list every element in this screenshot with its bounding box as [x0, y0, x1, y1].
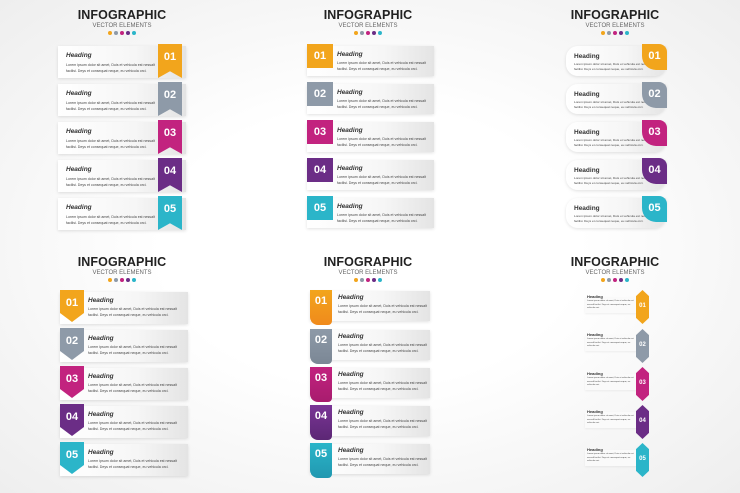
panel 1: ribbon bookmarks: 02 [164, 89, 176, 101]
row 02: Heading [338, 333, 364, 340]
panel 1: ribbon bookmarks: 04 [164, 165, 176, 177]
title: INFOGRAPHIC [571, 255, 659, 269]
title: VECTOR ELEMENTS [339, 270, 397, 276]
row 04 [60, 406, 188, 438]
row 02 [307, 84, 434, 114]
row 02: Lorem ipsum dolor sit amet, Duis et vehicula est nessalt facilisi. Deys et consequat neque, eu vehicula orci. [337, 99, 426, 108]
panel 6: hexagon arrows: 02 [639, 342, 646, 348]
row 05 [307, 198, 434, 228]
panel 6: hexagon arrows: Heading [587, 294, 603, 299]
row 01: Lorem ipsum dolor sit amet, Duis et vehicula est nessalt facilisi. Deys et consequat neque, eu vehicula orci. [574, 62, 651, 71]
row 05: Heading [574, 205, 600, 212]
row 02 [310, 330, 430, 360]
row 03 [566, 122, 666, 152]
row 02: Lorem ipsum dolor sit amet, Duis et vehicula est nessalt facilisi. Deys et consequat neque, eu vehicula orci. [88, 345, 177, 354]
row 02: Lorem ipsum dolor sit amet, Duis et vehicula est nessalt facilisi. Deys et consequat neque, eu vehicula orci. [66, 101, 155, 110]
panel 6: hexagon arrows: 01 [639, 303, 646, 309]
row 01: Heading [337, 51, 363, 58]
row 03 [585, 374, 637, 390]
row 03: Heading [337, 127, 363, 134]
panel 2: left tabs: 03 [314, 126, 326, 138]
row 03: Lorem ipsum dolor sit amet, Duis et vehicula est nessalt facilisi. Deys et consequat neque, eu vehicula orci. [574, 138, 651, 147]
row 05: Lorem ipsum dolor sit amet, Duis et vehicula est nessalt facilisi. Deys et consequat neque, eu vehicula orci. [338, 457, 427, 466]
row 04: Lorem ipsum dolor sit amet, Duis et vehicula est nessalt facilisi. Deys et consequat neque, eu vehicula orci. [338, 419, 427, 428]
panel 3: rounded corner tabs: 02 [648, 88, 661, 100]
row 03: Lorem ipsum dolor sit amet, Duis et vehicula est nessalt facilisi. Deys et consequat neque, eu vehicula orci. [66, 139, 155, 148]
panel 6: hexagon arrows: 05 [639, 456, 646, 462]
row 04: Heading [338, 409, 364, 416]
row 05 [566, 198, 666, 228]
row 02 [585, 335, 637, 351]
panel 5: scroll tabs: 05 [315, 448, 327, 460]
title [571, 8, 659, 35]
panel 5: scroll tabs [309, 255, 431, 478]
panel 2: left tabs: 01 [314, 50, 326, 62]
panel 6: hexagon arrows: 03 [639, 380, 646, 386]
row 03 [58, 122, 186, 154]
title: VECTOR ELEMENTS [586, 270, 644, 276]
panel 4: pennant tabs: 01 [66, 297, 78, 309]
panel 3: rounded corner tabs: 03 [648, 126, 661, 138]
panel 6: hexagon arrows [571, 255, 659, 477]
row 03: Lorem ipsum dolor sit amet, Duis et vehicula est nessalt facilisi. Deys et consequat neque, eu vehicula orci. [337, 137, 426, 146]
title [324, 255, 412, 282]
title [324, 8, 412, 35]
row 04: Heading [574, 167, 600, 174]
row 03: Lorem ipsum dolor sit amet, Duis et vehicula est nessalt facilisi. Deys et consequat neque, eu vehicula orci. [587, 377, 634, 386]
row 04: Heading [337, 165, 363, 172]
row 02: Lorem ipsum dolor sit amet, Duis et vehicula est nessalt facilisi. Deys et consequat neque, eu vehicula orci. [574, 100, 651, 109]
panel 3: rounded corner tabs: 01 [648, 50, 661, 62]
title [78, 255, 166, 282]
panel 4: pennant tabs: 05 [66, 449, 78, 461]
panel 6: hexagon arrows: Heading [587, 409, 603, 414]
row 01 [60, 292, 188, 324]
row 02: Heading [88, 335, 114, 342]
row 01: Lorem ipsum dolor sit amet, Duis et vehicula est nessalt facilisi. Deys et consequat neque, eu vehicula orci. [587, 300, 634, 309]
panel 3: rounded corner tabs: 05 [648, 202, 661, 214]
title: VECTOR ELEMENTS [586, 23, 644, 29]
row 04 [585, 412, 637, 428]
row 01 [310, 291, 430, 321]
row 01: Heading [338, 294, 364, 301]
row 03 [307, 122, 434, 152]
panel 2: left tabs: 05 [314, 202, 326, 214]
row 05: Heading [337, 203, 363, 210]
panel 4: pennant tabs [59, 255, 189, 478]
panel 1: ribbon bookmarks: 03 [164, 127, 176, 139]
panel 1: ribbon bookmarks: 05 [164, 203, 176, 215]
title: INFOGRAPHIC [324, 255, 412, 269]
row 01: Lorem ipsum dolor sit amet, Duis et vehicula est nessalt facilisi. Deys et consequat neque, eu vehicula orci. [338, 304, 427, 314]
row 02: Lorem ipsum dolor sit amet, Duis et vehicula est nessalt facilisi. Deys et consequat neque, eu vehicula orci. [587, 338, 634, 347]
panel 6: hexagon arrows: Heading [587, 332, 603, 337]
panel 1: ribbon bookmarks [57, 8, 187, 232]
row 03: Lorem ipsum dolor sit amet, Duis et vehicula est nessalt facilisi. Deys et consequat neque, eu vehicula orci. [338, 381, 427, 390]
row 05 [310, 444, 430, 474]
row 04 [58, 160, 186, 192]
row 01: Heading [66, 52, 92, 59]
row 05: Heading [338, 447, 364, 454]
row 05: Heading [66, 204, 92, 211]
row 04: Lorem ipsum dolor sit amet, Duis et vehicula est nessalt facilisi. Deys et consequat neque, eu vehicula orci. [88, 421, 177, 430]
row 03: Lorem ipsum dolor sit amet, Duis et vehicula est nessalt facilisi. Deys et consequat neque, eu vehicula orci. [88, 383, 177, 392]
panel 5: scroll tabs: 03 [315, 372, 327, 384]
row 01 [58, 46, 186, 78]
row 05 [60, 444, 188, 476]
row 03: Heading [574, 129, 600, 136]
row 01: Heading [574, 53, 600, 60]
row 04: Heading [88, 411, 114, 418]
row 01 [566, 46, 666, 76]
row 05: Lorem ipsum dolor sit amet, Duis et vehicula est nessalt facilisi. Deys et consequat neque, eu vehicula orci. [88, 459, 177, 468]
panel 5: scroll tabs: 02 [315, 334, 327, 346]
row 02: Heading [66, 90, 92, 97]
row 03: Heading [88, 373, 114, 380]
title: INFOGRAPHIC [78, 255, 166, 269]
row 02: Heading [574, 91, 600, 98]
row 05 [58, 198, 186, 230]
panel 4: pennant tabs: 02 [66, 335, 78, 347]
title [571, 255, 659, 282]
row 01: Lorem ipsum dolor sit amet, Duis et vehicula est nessalt facilisi. Deys et consequat neque, eu vehicula orci. [66, 63, 155, 72]
row 01: Lorem ipsum dolor sit amet, Duis et vehicula est nessalt facilisi. Deys et consequat neque, eu vehicula orci. [337, 61, 426, 70]
row 04: Lorem ipsum dolor sit amet, Duis et vehicula est nessalt facilisi. Deys et consequat neque, eu vehicula orci. [66, 177, 155, 186]
row 02 [60, 330, 188, 362]
row 05: Lorem ipsum dolor sit amet, Duis et vehicula est nessalt facilisi. Deys et consequat neque, eu vehicula orci. [337, 213, 426, 222]
row 04: Lorem ipsum dolor sit amet, Duis et vehicula est nessalt facilisi. Deys et consequat neque, eu vehicula orci. [587, 415, 634, 424]
row 02: Heading [337, 89, 363, 96]
panel 2: left tabs: 04 [314, 164, 326, 176]
title [78, 8, 166, 35]
row 02: Lorem ipsum dolor sit amet, Duis et vehicula est nessalt facilisi. Deys et consequat neque, eu vehicula orci. [338, 343, 427, 352]
row 01 [307, 46, 434, 76]
title: INFOGRAPHIC [78, 8, 166, 22]
row 05 [585, 450, 637, 466]
row 03: Heading [338, 371, 364, 378]
panel 4: pennant tabs: 04 [66, 411, 78, 423]
row 01: Lorem ipsum dolor sit amet, Duis et vehicula est nessalt facilisi. Deys et consequat neque, eu vehicula orci. [88, 307, 177, 316]
title: VECTOR ELEMENTS [93, 270, 151, 276]
row 02 [58, 84, 186, 116]
panel 3: rounded corner tabs: 04 [648, 164, 661, 176]
row 04 [307, 160, 434, 190]
row 04: Lorem ipsum dolor sit amet, Duis et vehicula est nessalt facilisi. Deys et consequat neque, eu vehicula orci. [337, 175, 426, 184]
panel 3: rounded corner tabs [565, 8, 667, 230]
panel 1: ribbon bookmarks: 01 [164, 51, 176, 63]
row 04: Lorem ipsum dolor sit amet, Duis et vehicula est nessalt facilisi. Deys et consequat neque, eu vehicula orci. [574, 176, 651, 185]
row 04: Heading [66, 166, 92, 173]
row 01 [585, 297, 637, 313]
title: INFOGRAPHIC [324, 8, 412, 22]
title: INFOGRAPHIC [571, 8, 659, 22]
panel 2: left tabs [306, 8, 435, 230]
title: VECTOR ELEMENTS [93, 23, 151, 29]
row 03 [60, 368, 188, 400]
panel 4: pennant tabs: 03 [66, 373, 78, 385]
row 05: Heading [88, 449, 114, 456]
row 04 [566, 160, 666, 190]
row 03: Heading [66, 128, 92, 135]
row 02 [566, 84, 666, 114]
panel 6: hexagon arrows: Heading [587, 447, 603, 452]
panel 2: left tabs: 02 [314, 88, 326, 100]
row 04 [310, 406, 430, 436]
title: VECTOR ELEMENTS [339, 23, 397, 29]
panel 6: hexagon arrows: Heading [587, 371, 603, 376]
row 05: Lorem ipsum dolor sit amet, Duis et vehicula est nessalt facilisi. Deys et consequat neque, eu vehicula orci. [587, 453, 634, 462]
panel 5: scroll tabs: 04 [315, 410, 327, 422]
row 05: Lorem ipsum dolor sit amet, Duis et vehicula est nessalt facilisi. Deys et consequat neque, eu vehicula orci. [66, 215, 155, 224]
panel 5: scroll tabs: 01 [315, 295, 327, 307]
row 05: Lorem ipsum dolor sit amet, Duis et vehicula est nessalt facilisi. Deys et consequat neque, eu vehicula orci. [574, 214, 651, 223]
row 01: Heading [88, 297, 114, 304]
panel 6: hexagon arrows: 04 [639, 418, 646, 424]
row 03 [310, 368, 430, 398]
